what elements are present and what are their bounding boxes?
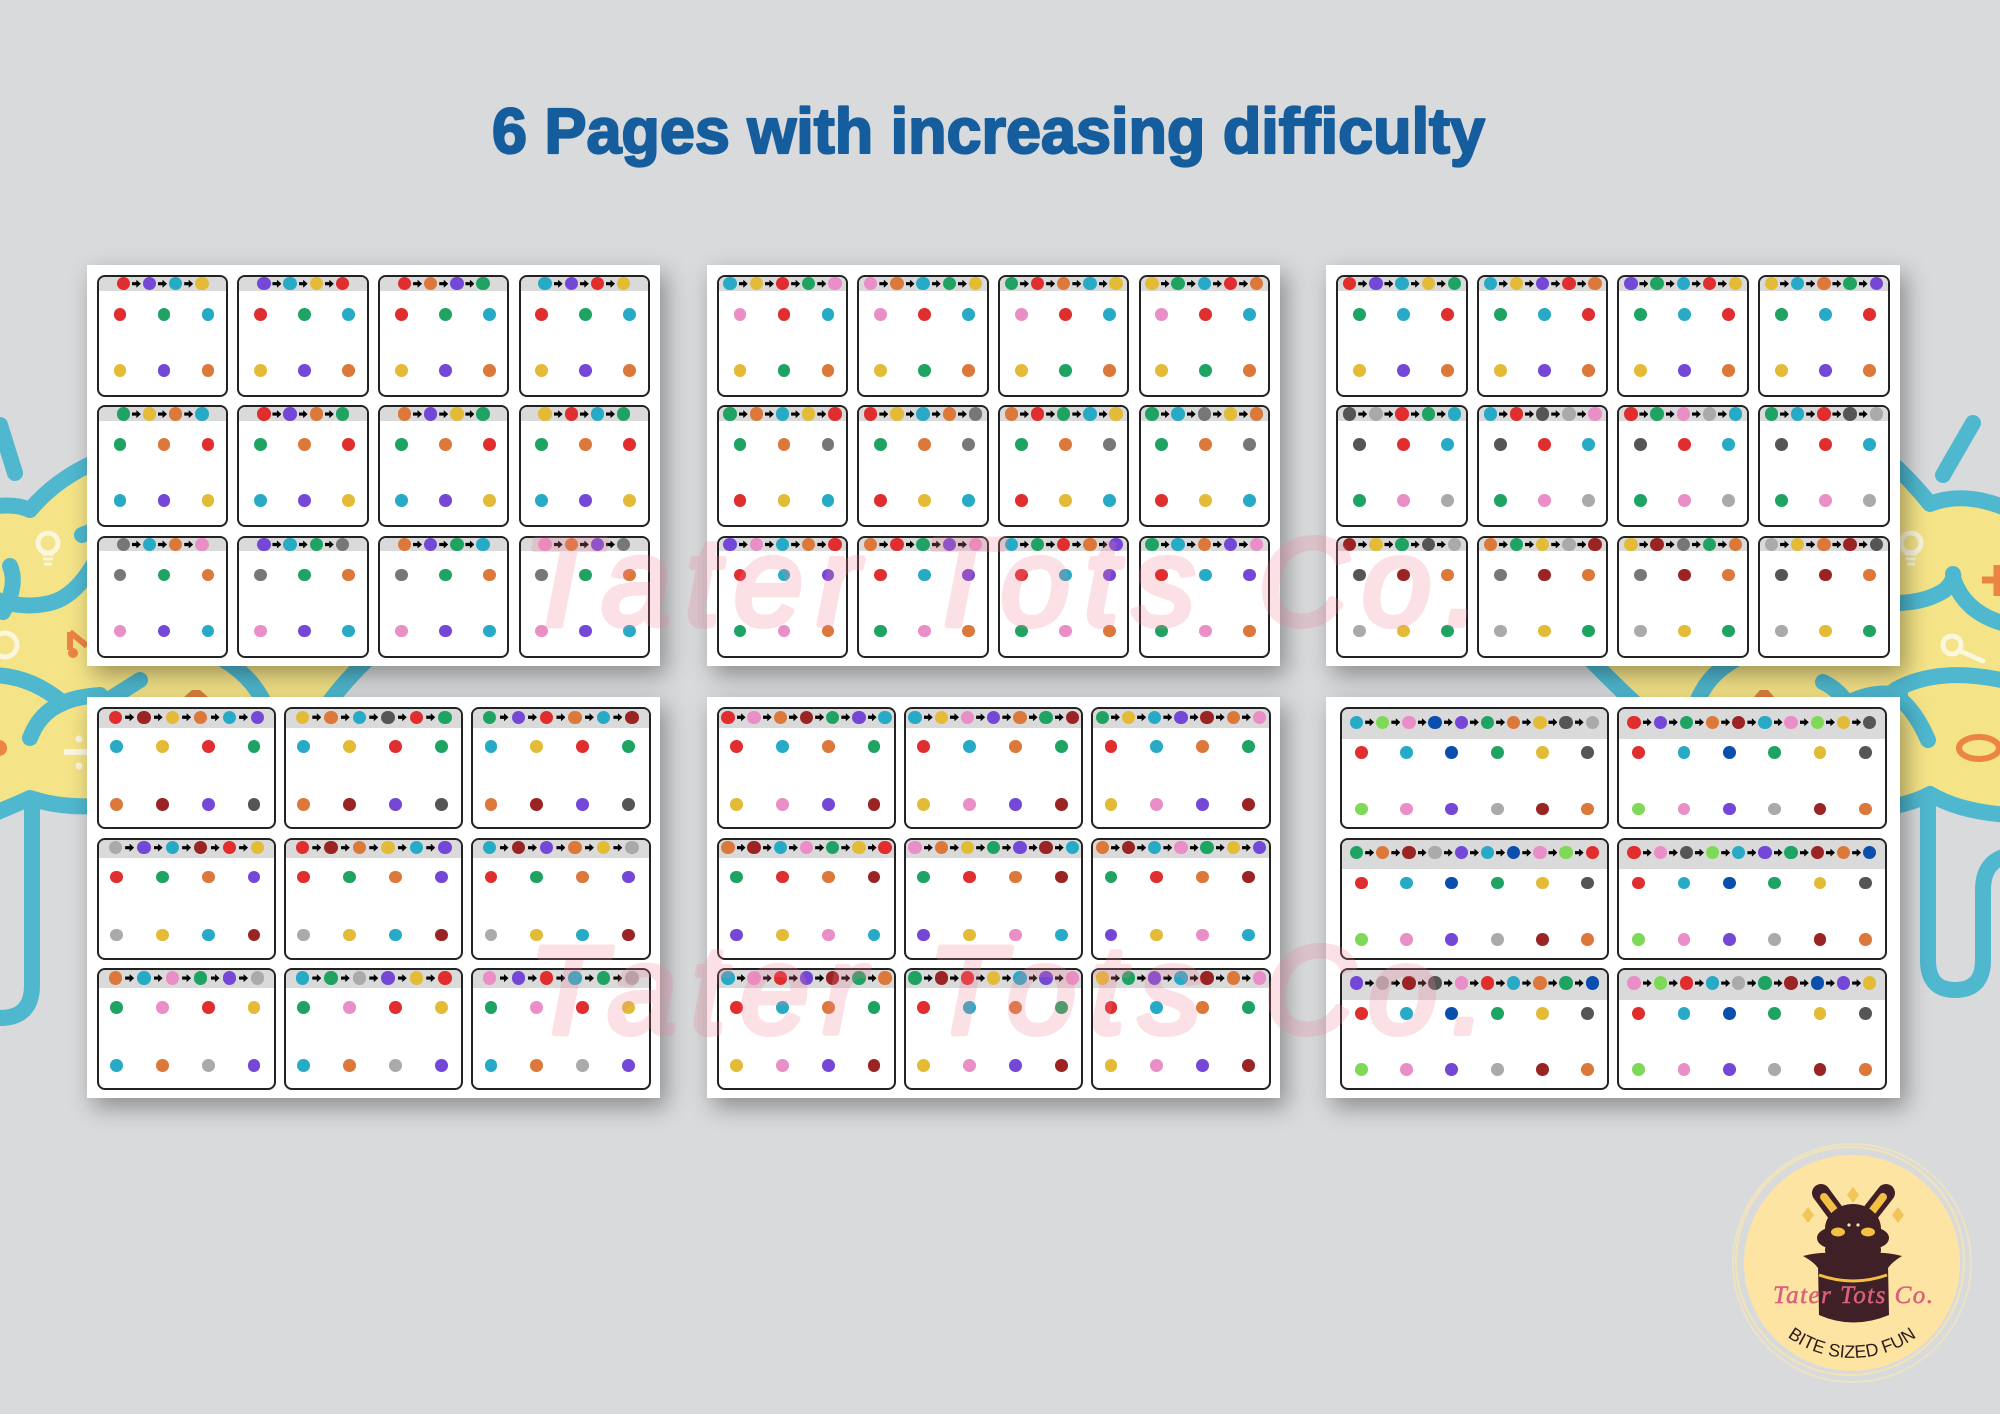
card 3 bbox=[471, 707, 651, 829]
card 5 bbox=[284, 838, 463, 960]
card 8 bbox=[519, 405, 650, 527]
card 5 bbox=[904, 838, 1083, 960]
card 7 bbox=[1617, 405, 1749, 527]
card 5 bbox=[1340, 968, 1609, 1090]
card 9 bbox=[471, 968, 651, 1090]
card 3 bbox=[378, 275, 509, 397]
card 1 bbox=[97, 275, 228, 397]
card 2 bbox=[904, 707, 1083, 829]
card 2 bbox=[857, 275, 989, 397]
card 10 bbox=[237, 536, 369, 658]
card 6 bbox=[471, 838, 651, 960]
card 2 bbox=[284, 707, 463, 829]
card 6 bbox=[1091, 838, 1271, 960]
card 4 bbox=[717, 838, 896, 960]
card 12 bbox=[1139, 536, 1270, 658]
card 6 bbox=[1617, 968, 1887, 1090]
title: 6 Pages with increasing difficulty bbox=[492, 95, 1485, 167]
card 3 bbox=[998, 275, 1129, 397]
watermark: Tater Tots Co. (two lines): Tater Tots Co. bbox=[523, 514, 1480, 652]
card 12 bbox=[1758, 536, 1890, 658]
card 4 bbox=[519, 275, 650, 397]
card 6 bbox=[237, 405, 369, 527]
card 9 bbox=[717, 536, 848, 658]
watermark: Tater Tots Co. (two lines): Tater Tots Co. bbox=[529, 922, 1486, 1060]
card 4 bbox=[1139, 275, 1270, 397]
panel: page 5, seven-dot sequences bbox=[706, 697, 1280, 1098]
logo: Tater Tots Co. rabbit in a hat: BITE SIZED FUN bbox=[1788, 1327, 1916, 1358]
card 8 bbox=[904, 968, 1083, 1090]
card 3 bbox=[1617, 275, 1749, 397]
card 5 bbox=[97, 405, 228, 527]
panel: page 6, ten-dot sequences bbox=[1326, 697, 1900, 1098]
card 4 bbox=[97, 838, 276, 960]
logo: Tater Tots Co. rabbit in a hat: Tater Tots Co. bbox=[1773, 1282, 1933, 1309]
card 2 bbox=[237, 275, 369, 397]
card 11 bbox=[1617, 536, 1749, 658]
panel: page 4, six-dot sequences bbox=[86, 697, 660, 1098]
card 9 bbox=[97, 536, 228, 658]
card 3 bbox=[1091, 707, 1271, 829]
card 10 bbox=[1477, 536, 1608, 658]
card 8 bbox=[1139, 405, 1270, 527]
right brain bbox=[1583, 423, 2000, 990]
card 1 bbox=[717, 275, 848, 397]
card 4 bbox=[1617, 838, 1887, 960]
card 11 bbox=[378, 536, 509, 658]
card 7 bbox=[998, 405, 1129, 527]
card 4 bbox=[1758, 275, 1890, 397]
card 9 bbox=[1091, 968, 1271, 1090]
card 1 bbox=[1340, 707, 1609, 829]
card 6 bbox=[1477, 405, 1608, 527]
card 1 bbox=[97, 707, 276, 829]
card 2 bbox=[1617, 707, 1887, 829]
card 10 bbox=[857, 536, 989, 658]
card 1 bbox=[1336, 275, 1468, 397]
card 11 bbox=[998, 536, 1129, 658]
card 9 bbox=[1336, 536, 1468, 658]
card 2 bbox=[1477, 275, 1608, 397]
card 7 bbox=[97, 968, 276, 1090]
card 3 bbox=[1340, 838, 1609, 960]
card 12 bbox=[519, 536, 650, 658]
card 7 bbox=[378, 405, 509, 527]
left brain bbox=[0, 425, 372, 1018]
panel: page 1, four-dot sequences bbox=[86, 265, 660, 666]
card 6 bbox=[857, 405, 989, 527]
card 7 bbox=[717, 968, 896, 1090]
panel: page 2, five-dot sequences bbox=[706, 265, 1280, 666]
card 1 bbox=[717, 707, 896, 829]
card 5 bbox=[717, 405, 848, 527]
card 5 bbox=[1336, 405, 1468, 527]
card 8 bbox=[284, 968, 463, 1090]
card 8 bbox=[1758, 405, 1890, 527]
panel: page 3, five-dot sequences bbox=[1326, 265, 1900, 666]
